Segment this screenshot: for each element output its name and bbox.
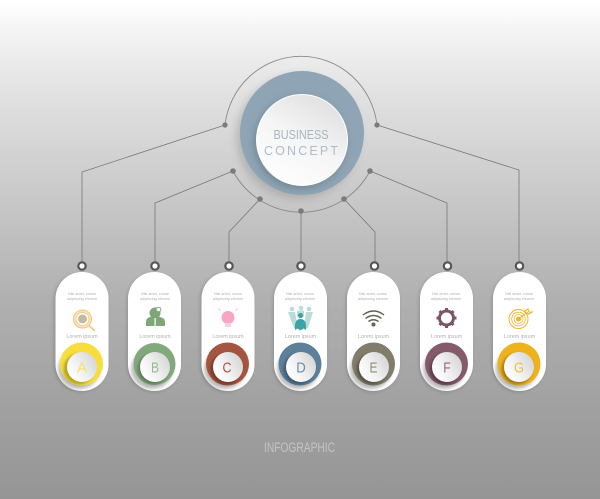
card B [127, 262, 181, 392]
label: Lorem ipsum [358, 334, 390, 340]
icon: light bulb [218, 308, 238, 327]
badge disc [504, 352, 534, 382]
badge ring [423, 349, 465, 389]
card D [273, 262, 327, 392]
body text: Nisl amet, conse [141, 292, 169, 296]
upper arc [225, 56, 377, 125]
icon: magnifier [74, 310, 95, 331]
hub shadow [236, 75, 360, 199]
label: Lorem ipsum [431, 334, 463, 340]
badge ring [496, 349, 538, 389]
badge disc [432, 352, 462, 382]
badge letter: F [443, 360, 451, 376]
badge letter: A [77, 360, 87, 376]
card G: adipiscing eliumm [504, 297, 534, 301]
body text: Nisl amet, conse [68, 292, 96, 296]
blue ring [240, 71, 364, 195]
icon: people group [288, 306, 313, 330]
card G [492, 262, 546, 392]
card D: adipiscing eliumm [285, 297, 315, 301]
badge disc [359, 352, 389, 382]
badge letter: C [222, 360, 232, 376]
connector ring [151, 262, 159, 270]
badge ring [58, 349, 100, 389]
badge letter: E [370, 360, 378, 376]
connector ring [297, 262, 305, 270]
badge letter: B [151, 360, 159, 376]
label: Lorem ipsum [504, 334, 536, 340]
body text: Nisl amet, conse [359, 292, 387, 296]
icon: businessman [146, 307, 165, 326]
white disc [256, 94, 348, 186]
label: Lorem ipsum [212, 334, 244, 340]
badge disc [286, 352, 316, 382]
connector ring [371, 262, 378, 270]
body text: Nisl amet, conse [214, 292, 242, 296]
label: Lorem ipsum [66, 334, 98, 340]
body text: Nisl amet, conse [286, 292, 314, 296]
label: Lorem ipsum [285, 334, 317, 340]
footer title: INFOGRAPHIC [264, 440, 335, 455]
card E: adipiscing eliumm [358, 297, 388, 301]
icon: target [509, 309, 532, 328]
badge ring [131, 349, 173, 389]
lower arc [233, 171, 370, 212]
badge disc [140, 352, 170, 382]
badge ring [204, 349, 246, 389]
hub nodes [222, 122, 380, 214]
connector ring [225, 262, 233, 270]
body text: Nisl amet, conse [432, 292, 460, 296]
badge letter: G [514, 360, 524, 376]
badge disc [213, 352, 243, 382]
card F: adipiscing eliumm [431, 297, 461, 301]
card B: adipiscing eliumm [140, 297, 170, 301]
heading: concept: CONCEPT [264, 144, 338, 158]
icon: gear [436, 308, 456, 328]
card C [200, 262, 254, 392]
label: Lorem ipsum [139, 334, 171, 340]
card C: adipiscing eliumm [213, 297, 243, 301]
connector lines [82, 125, 519, 264]
card A [54, 262, 108, 392]
connector ring [78, 262, 86, 270]
badge ring [277, 349, 319, 389]
connector ring [444, 262, 451, 270]
central hub [222, 56, 380, 214]
connector ring [516, 262, 523, 270]
body text: Nisl amet, conse [505, 292, 533, 296]
badge letter: D [296, 360, 306, 376]
card E [346, 262, 400, 392]
card F [419, 262, 473, 392]
card A: adipiscing eliumm [67, 297, 97, 301]
icon: wifi [363, 311, 384, 326]
heading: business: BUSINESS [274, 127, 329, 142]
disc shadow [254, 97, 346, 189]
badge ring [350, 349, 392, 389]
badge disc [67, 352, 97, 382]
